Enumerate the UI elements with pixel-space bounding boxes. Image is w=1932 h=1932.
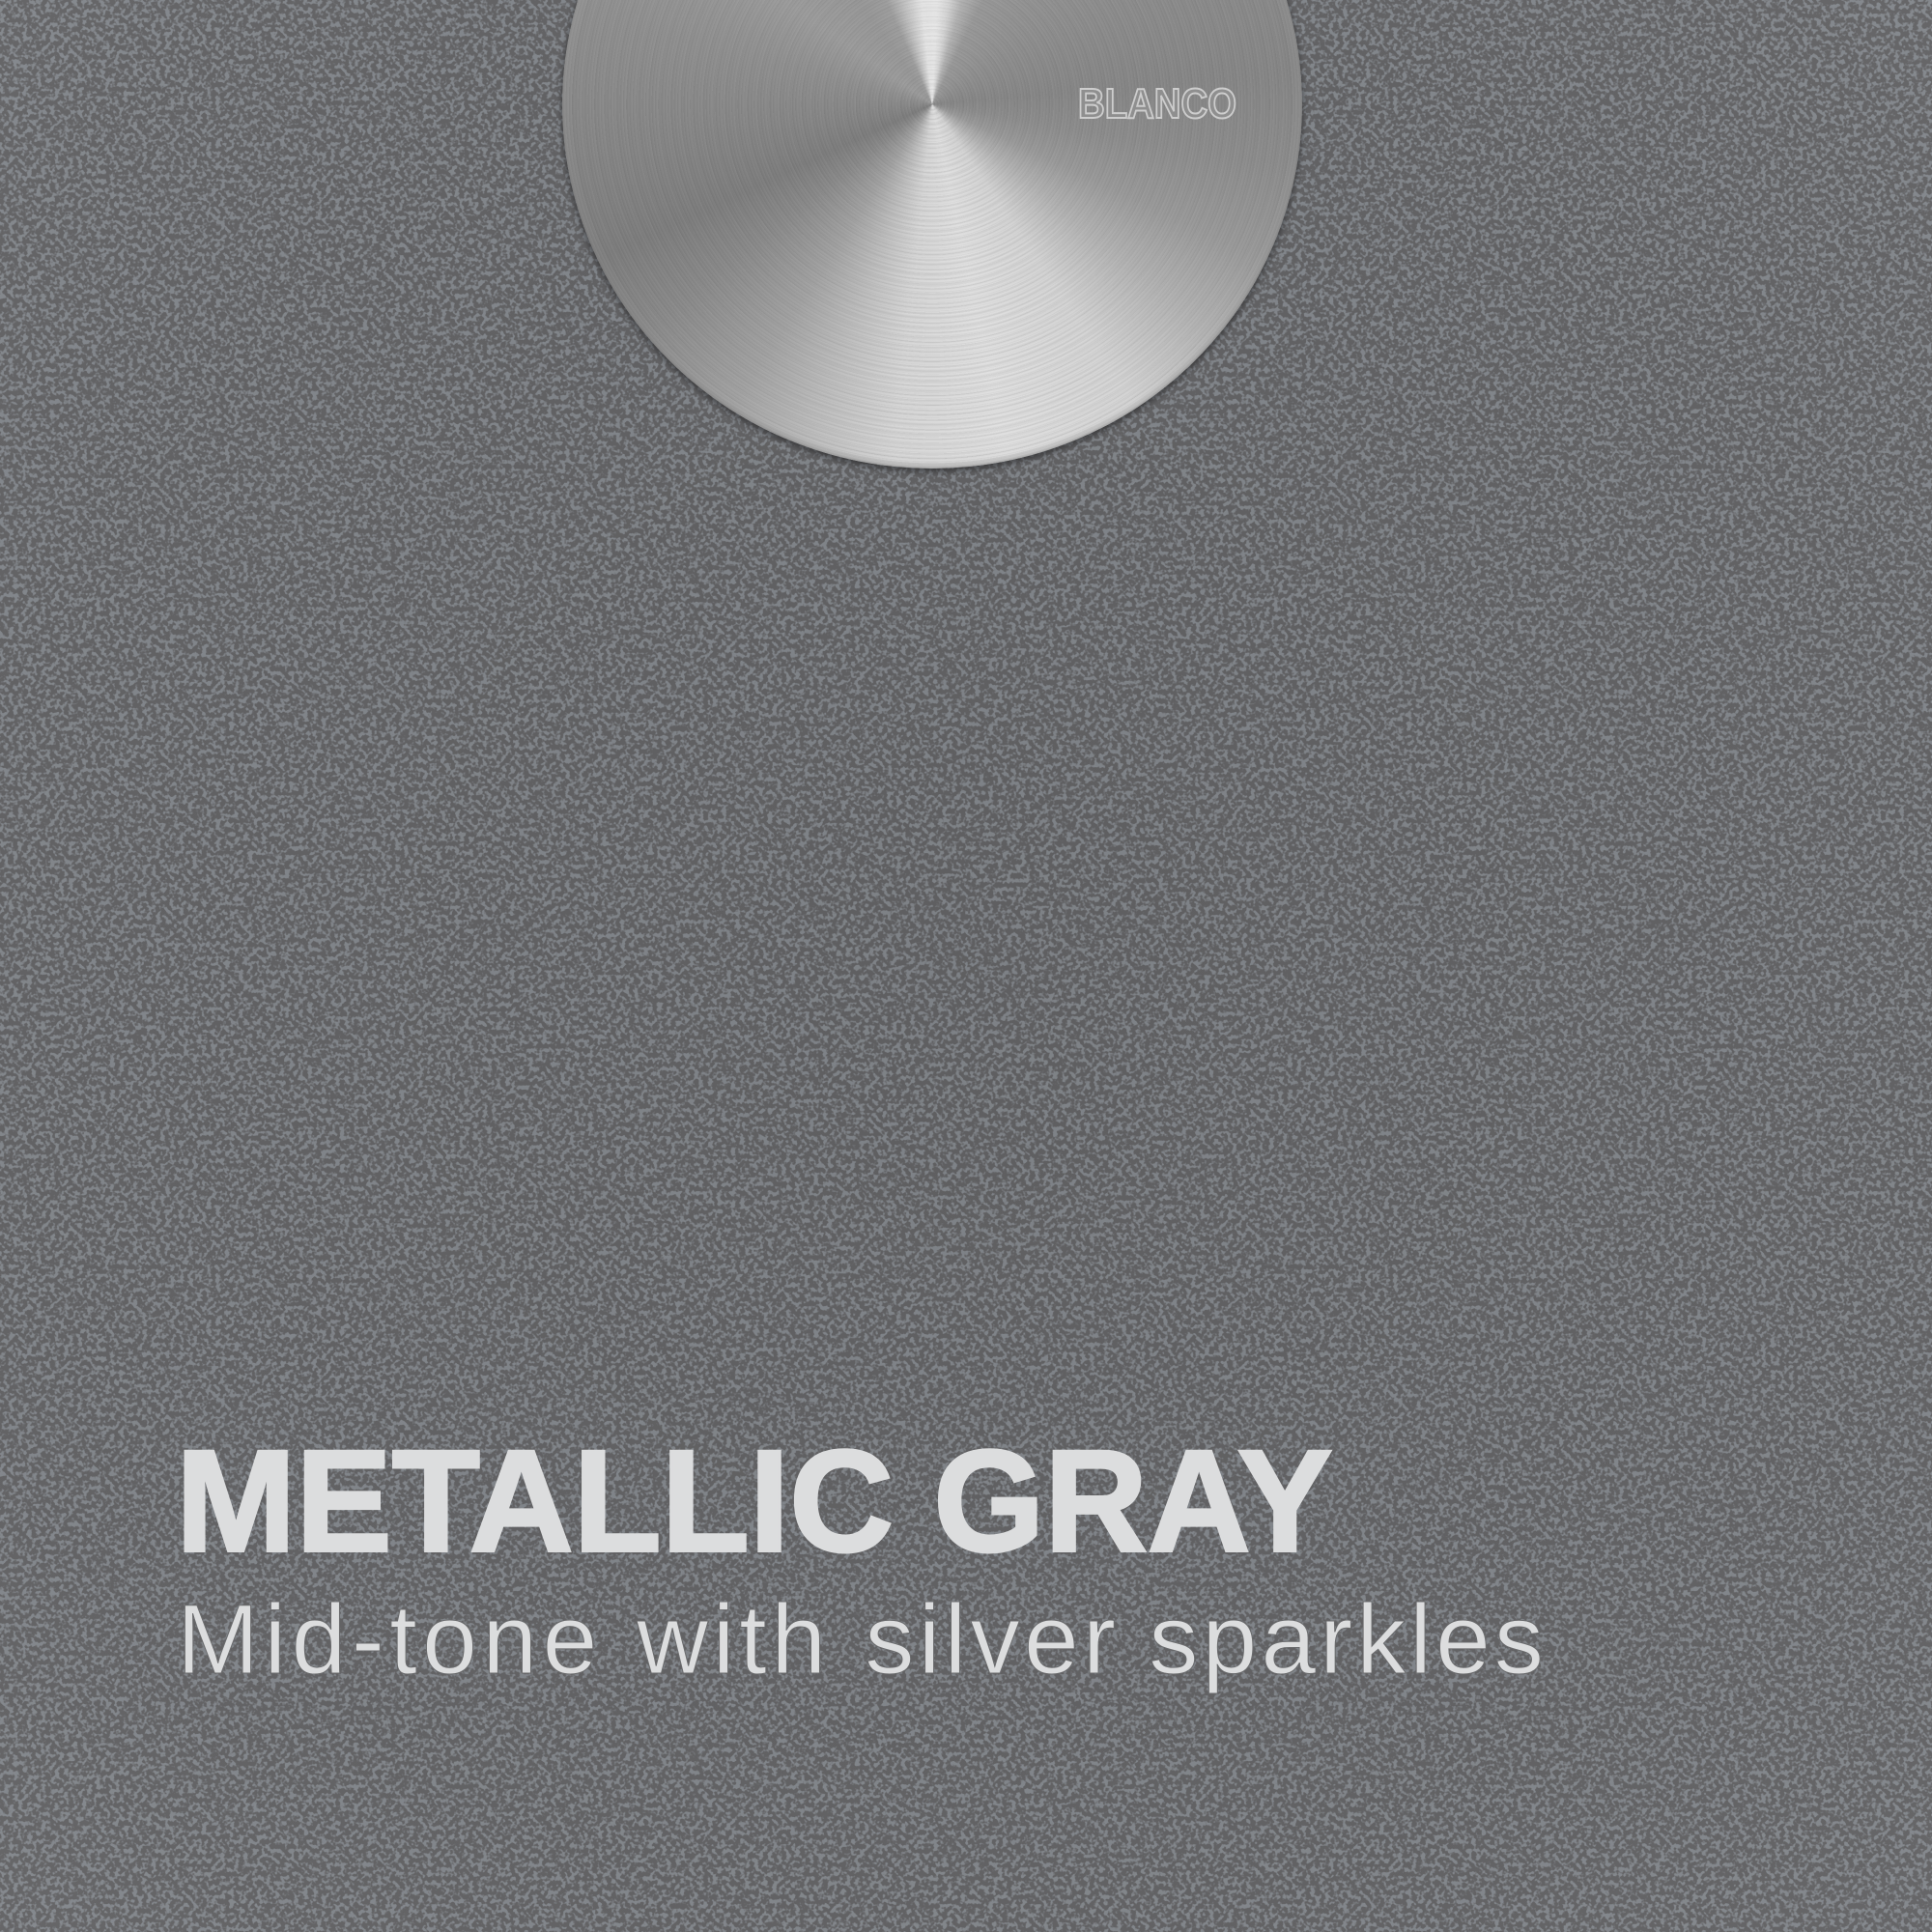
- icon: brushed stainless steel drain disc: [562, 0, 1302, 469]
- title: METALLIC GRAY: [176, 1435, 1333, 1565]
